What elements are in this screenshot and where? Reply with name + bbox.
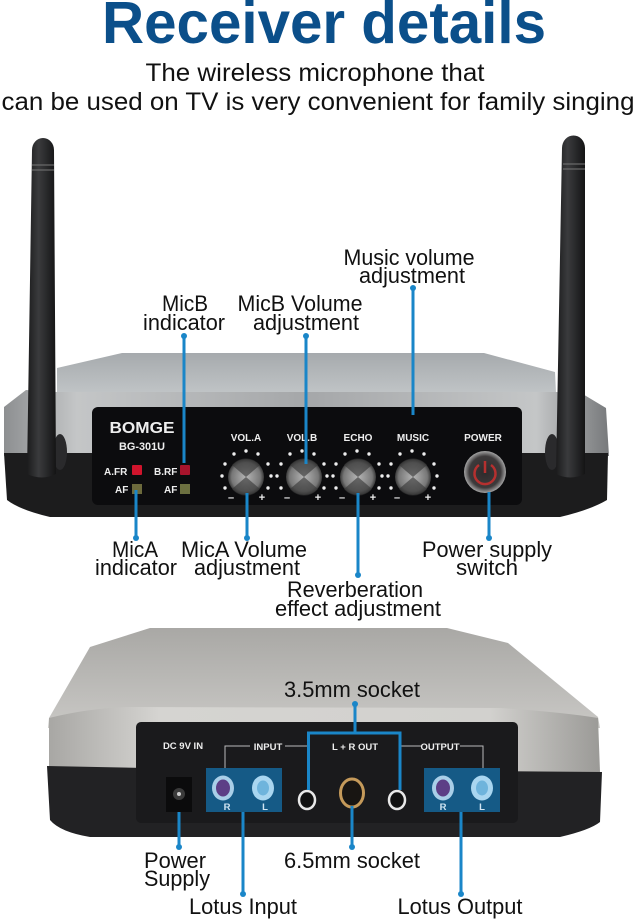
knob VOL.A — [220, 449, 273, 496]
RCA jacks — [212, 776, 493, 800]
callout: MicA indicator: indicator — [95, 555, 177, 580]
callout: Music volume adjustment: Music volume — [344, 245, 474, 270]
knob minus and plus marks: + — [259, 492, 265, 504]
RCA labels: L — [479, 802, 485, 813]
callout: Power Supply: Supply — [144, 866, 210, 891]
knob minus and plus marks: + — [315, 492, 321, 504]
left antenna — [27, 138, 56, 478]
indicator labels: AF — [115, 485, 128, 496]
callout: Reverberation effect adjustment: effect adjustment — [275, 596, 441, 621]
callout: 3.5mm socket: 3.5mm socket — [284, 677, 420, 702]
indicator labels: AF — [164, 485, 177, 496]
knob labels: POWER — [464, 433, 503, 444]
subtitle: The wireless microphone that — [146, 59, 485, 87]
callout: Power supply switch — [422, 492, 552, 580]
callout: MicA indicator: MicA — [112, 537, 158, 562]
rear panel labels: DC 9V IN — [163, 741, 203, 752]
rear panel labels: L + R OUT — [332, 742, 378, 753]
callout: Lotus Input — [189, 812, 297, 919]
rear black base — [47, 766, 602, 837]
callout: MicB Volume adjustment — [238, 291, 362, 464]
indicator labels: A.FR — [104, 467, 128, 478]
rear top surface — [48, 628, 600, 728]
callout: Lotus Input: Lotus Input — [189, 894, 297, 919]
callout: 3.5mm socket — [284, 677, 420, 790]
knob labels: VOL.B — [287, 433, 317, 444]
model text: BG-301U — [119, 441, 165, 453]
receiver black base — [4, 453, 608, 517]
input blue box — [206, 768, 282, 812]
callout: Power supply switch: Power supply — [422, 537, 552, 562]
knob minus and plus marks: + — [425, 492, 431, 504]
callout: Music volume adjustment: adjustment — [359, 263, 465, 288]
callout: Reverberation effect adjustment: Reverberation — [287, 577, 423, 602]
RCA labels: R — [224, 802, 231, 813]
knob minus and plus marks: – — [228, 492, 234, 504]
callout: MicA indicator — [95, 490, 177, 580]
bracket lines — [225, 746, 483, 768]
subtitle: can be used on TV is very convenient for family singing — [2, 88, 634, 116]
rear connector panel — [136, 722, 518, 823]
callout: MicB Volume adjustment: adjustment — [253, 310, 359, 335]
callout: MicB Volume adjustment: MicB Volume — [238, 291, 362, 316]
callout: Lotus Output: Lotus Output — [398, 894, 522, 919]
callout: Reverberation effect adjustment — [275, 493, 441, 621]
antenna mounts — [53, 434, 559, 470]
knob labels: VOL.A — [231, 433, 261, 444]
knob MUSIC — [386, 449, 439, 496]
callout: MicB indicator — [143, 291, 225, 463]
knob minus and plus marks: + — [370, 492, 376, 504]
callout: 6.5mm socket: 6.5mm socket — [284, 848, 420, 873]
callout: MicA Volume adjustment: adjustment — [194, 555, 300, 580]
rear panel labels: INPUT — [254, 742, 282, 753]
callout: 6.5mm socket — [284, 806, 420, 873]
knob VOL.B — [275, 449, 329, 496]
DC jack — [166, 777, 192, 812]
callout: MicB indicator: indicator — [143, 310, 225, 335]
icon: power button — [464, 451, 506, 493]
callout: Music volume adjustment — [344, 245, 474, 415]
receiver top surface — [57, 353, 556, 393]
knob labels: MUSIC — [397, 433, 429, 444]
callout: MicA Volume adjustment: MicA Volume — [181, 537, 307, 562]
brand text: BOMGE — [110, 420, 175, 437]
receiver silver band — [4, 390, 609, 456]
rear view of receiver — [47, 628, 602, 837]
indicator labels — [104, 467, 177, 496]
knob minus and plus marks — [228, 492, 431, 504]
front view of receiver — [4, 353, 609, 517]
knob labels — [231, 433, 503, 444]
indicator labels: B.RF — [154, 467, 177, 478]
callout: Power supply switch: switch — [456, 555, 518, 580]
indicator lights — [132, 465, 190, 494]
knob minus and plus marks: – — [394, 492, 400, 504]
output blue box — [424, 768, 500, 812]
rear panel labels — [163, 741, 460, 753]
callout: MicB indicator: MicB — [162, 291, 208, 316]
rear panel labels: OUTPUT — [420, 742, 460, 753]
callout: Power Supply — [144, 812, 210, 891]
RCA labels: L — [262, 802, 268, 813]
RCA labels — [224, 802, 485, 813]
right antenna — [556, 135, 585, 478]
subtitle — [2, 59, 634, 116]
RCA labels: R — [440, 802, 447, 813]
rear silver band — [49, 707, 600, 772]
front control panel — [92, 407, 522, 505]
knob minus and plus marks: – — [284, 492, 290, 504]
callout: Lotus Output — [398, 812, 522, 919]
3.5mm sockets — [299, 791, 405, 809]
knob minus and plus marks: – — [339, 492, 345, 504]
callout: MicA Volume adjustment — [181, 493, 307, 580]
callout: Power Supply: Power — [144, 848, 206, 873]
6.5mm socket — [340, 779, 364, 807]
knob ECHO — [331, 449, 384, 496]
knob labels: ECHO — [344, 433, 373, 444]
